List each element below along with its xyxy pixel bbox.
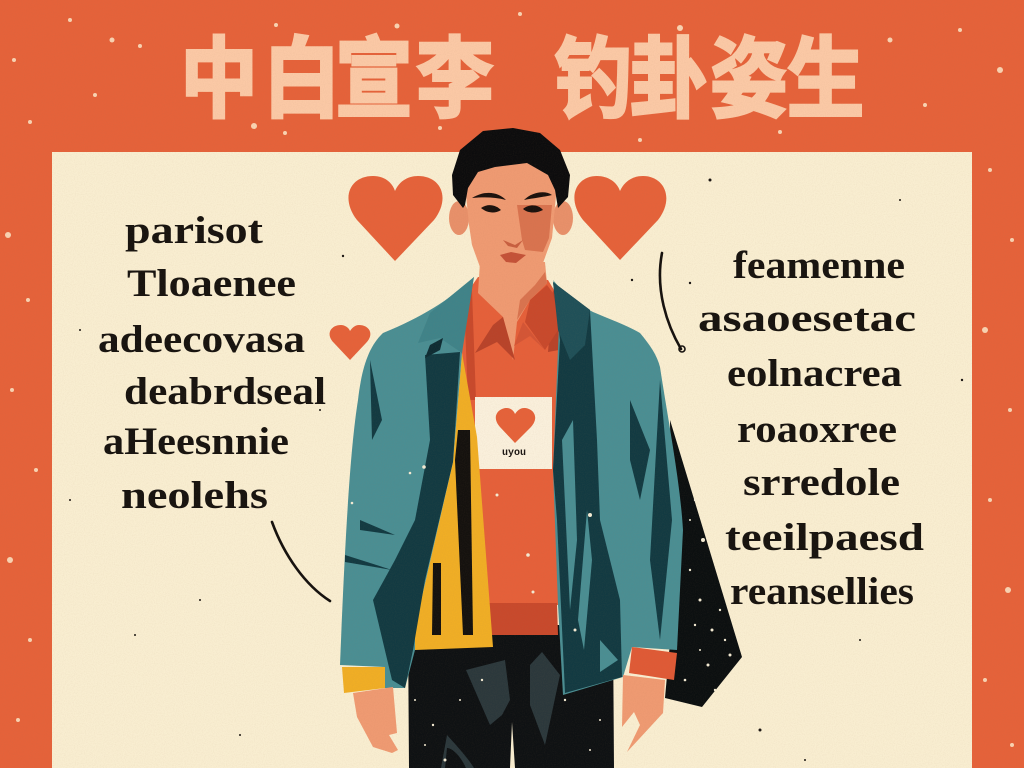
collar <box>418 277 474 353</box>
left hand <box>353 687 398 753</box>
shirt and sweater <box>462 277 560 635</box>
left text block: neolehs <box>121 474 268 517</box>
black cape <box>665 420 742 707</box>
shirt collar <box>475 285 560 360</box>
right text block: reansellies <box>730 570 914 613</box>
left text block: Tloaenee <box>127 262 296 305</box>
arrow: left curve <box>272 522 330 601</box>
trousers <box>408 625 614 768</box>
right hand <box>622 675 665 752</box>
neck <box>478 262 547 360</box>
heart: chest <box>496 408 535 443</box>
jacket teal streaks <box>562 420 618 672</box>
left text block: aHeesnnie <box>103 420 289 463</box>
chest label <box>475 397 552 469</box>
face <box>465 150 557 282</box>
right text block: srredole <box>743 461 900 504</box>
figure: young man <box>340 128 742 768</box>
right text block: asaoesetac <box>698 297 916 340</box>
title: 中白宣李钓卦姿生 <box>180 30 864 129</box>
panel: cream paper <box>52 152 972 768</box>
left text block: adeecovasa <box>98 318 305 361</box>
paper speckles <box>69 178 963 761</box>
left text block: deabrdseal <box>124 370 326 413</box>
left text block <box>98 209 326 517</box>
jacket, cape and trouser speckles <box>351 465 732 762</box>
right text block: roaoxree <box>737 408 897 451</box>
collar shadow <box>425 338 443 358</box>
ears <box>449 201 573 235</box>
chest text: uyou <box>502 448 526 459</box>
right text block: eolnacrea <box>727 352 902 395</box>
left text block: parisot <box>125 209 263 252</box>
right text block: teeilpaesd <box>725 516 924 559</box>
hair <box>452 128 570 208</box>
jacket shadows <box>553 282 622 693</box>
right text block <box>698 244 924 613</box>
arrow: right curve <box>660 253 685 352</box>
neck shadow <box>517 272 547 320</box>
right cuff <box>629 647 677 680</box>
face shadow <box>517 205 552 252</box>
heart: small left <box>330 325 370 360</box>
nose <box>503 240 523 248</box>
heart: large left <box>348 176 443 261</box>
left cuff <box>342 667 385 693</box>
yellow scarf <box>415 353 493 650</box>
heart: large right <box>574 176 666 260</box>
right text block: feamenne <box>733 244 905 287</box>
jacket <box>340 277 683 695</box>
eyes and brows <box>472 192 552 212</box>
lips <box>500 252 526 263</box>
